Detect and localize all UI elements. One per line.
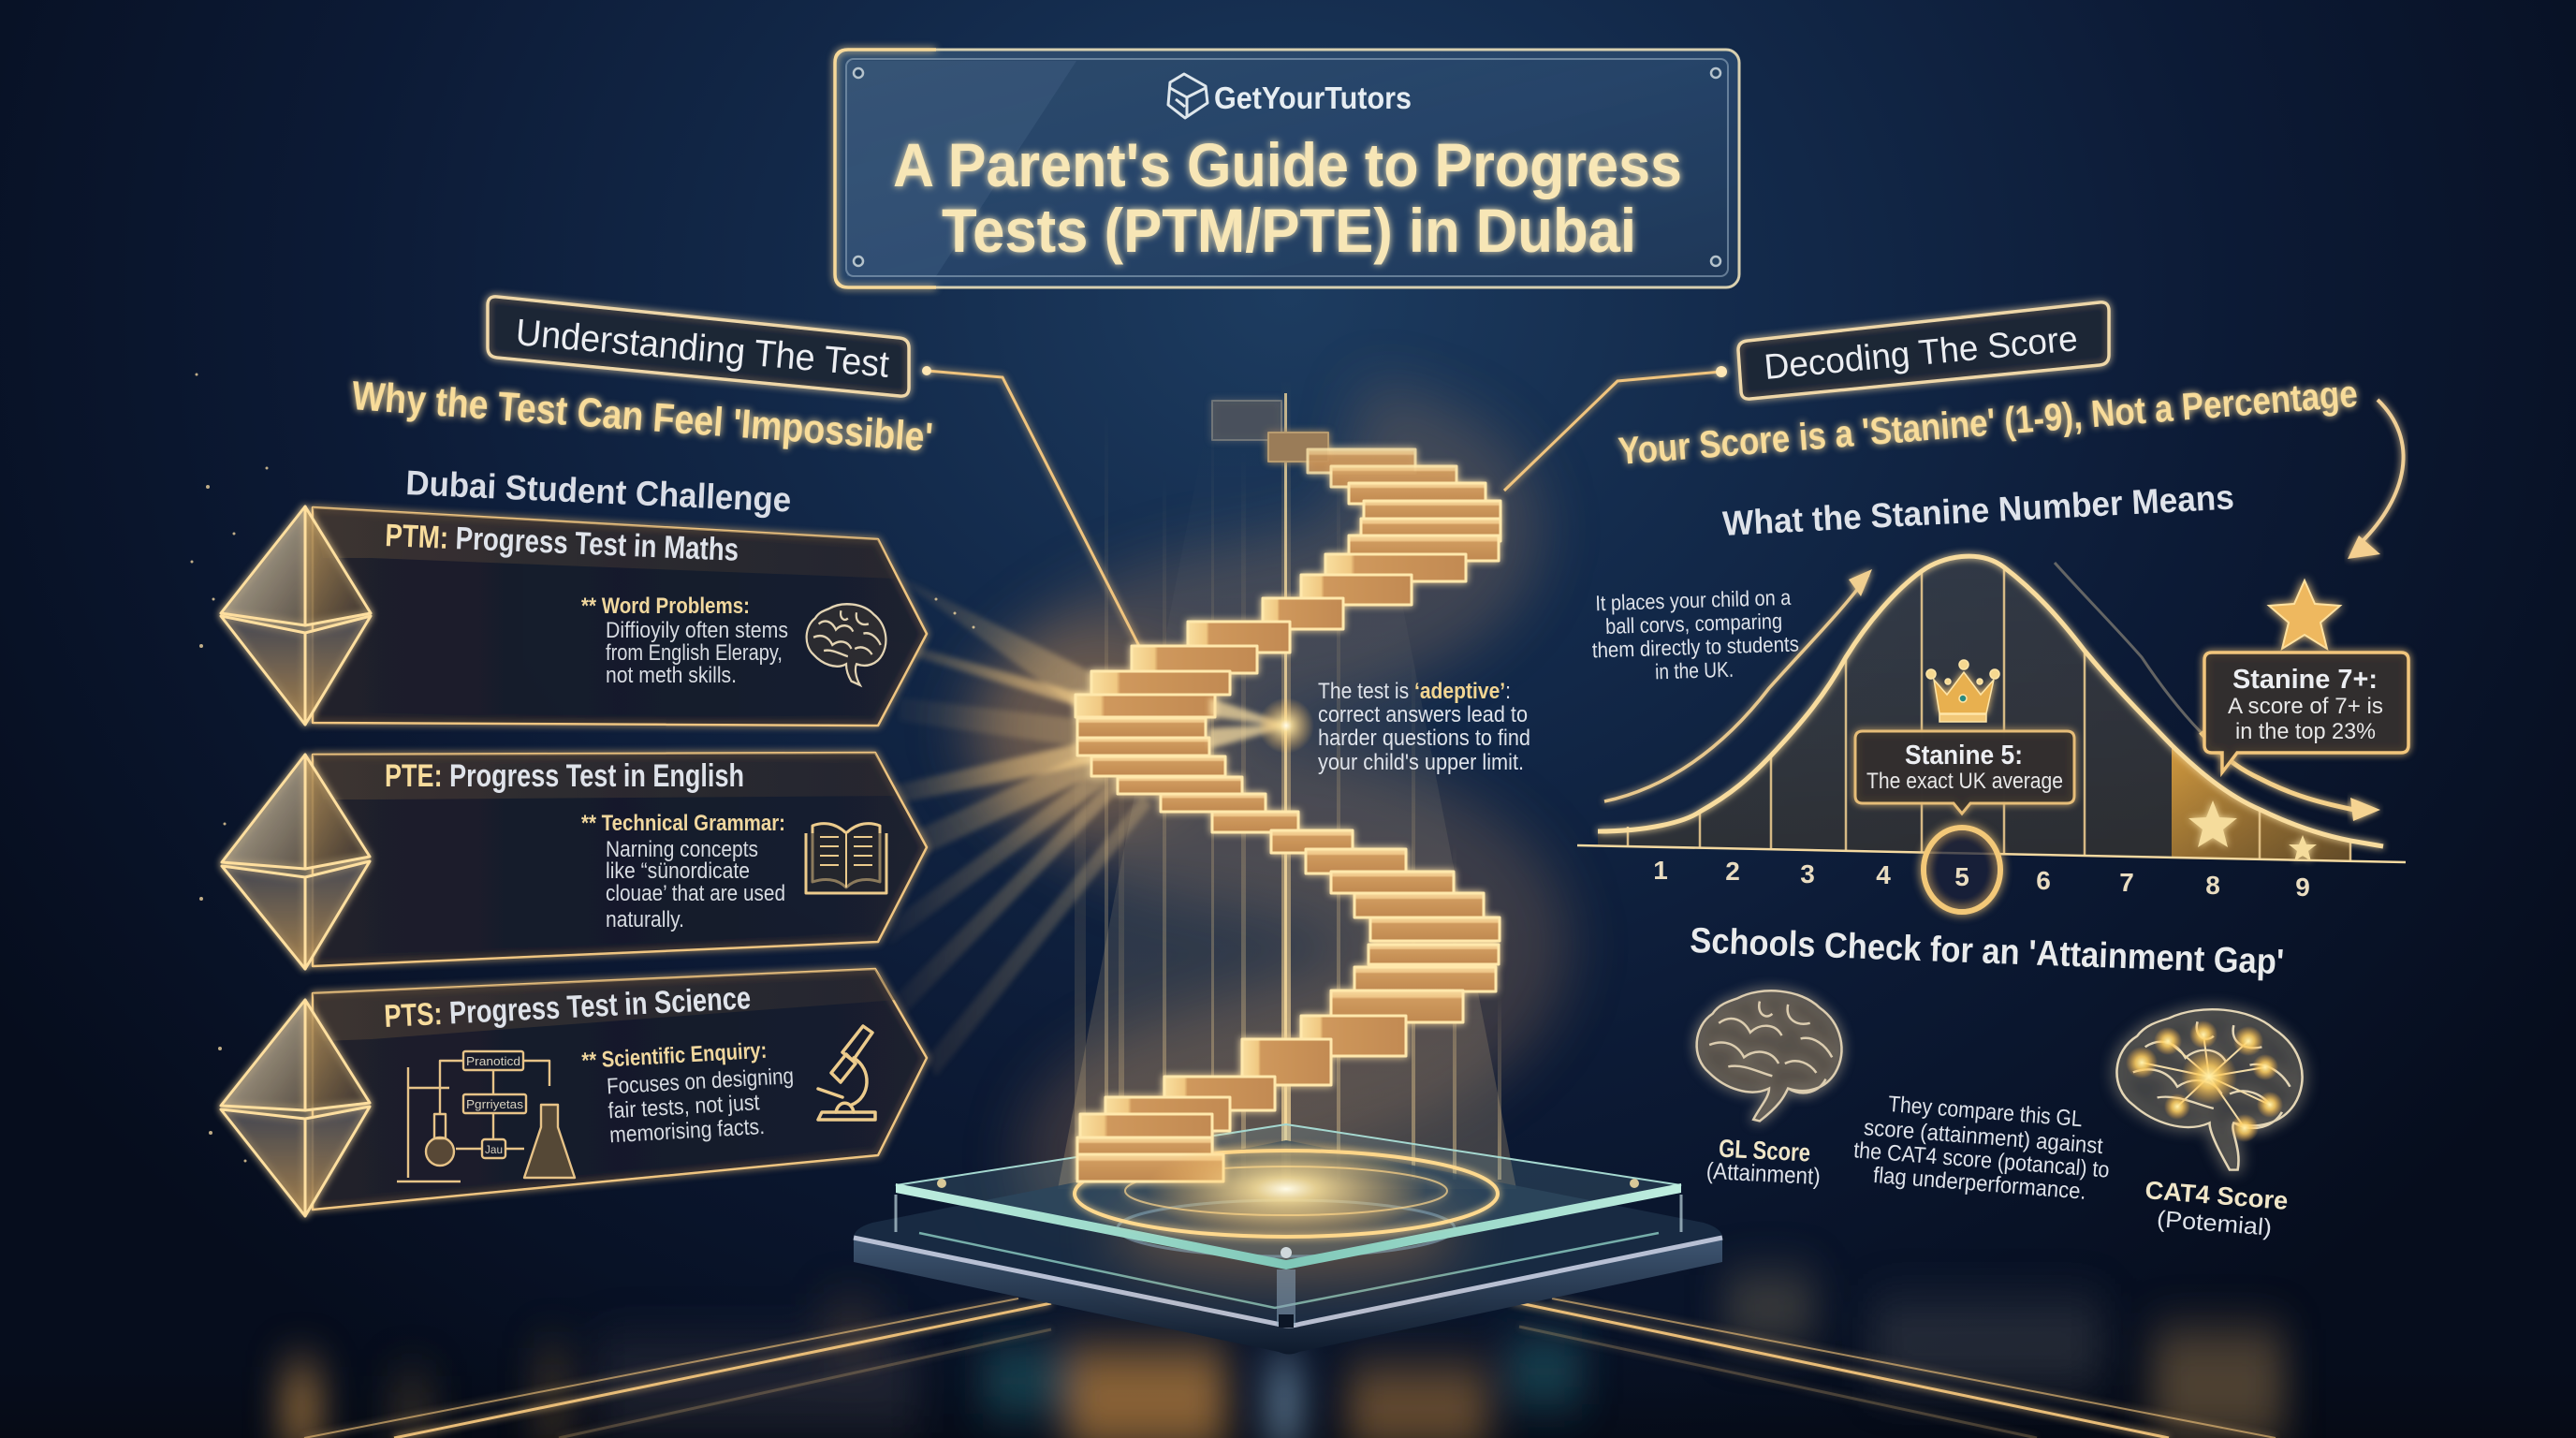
- axis numbers: 4: [1876, 860, 1891, 889]
- light beams behind staircase: [1058, 374, 1516, 1189]
- attainment gap explanation: They compare this GL: [1887, 1092, 2084, 1132]
- heading: your score is a stanine: Your Score is a 'Stanine' (1-9), Not a Percentage: [1617, 372, 2359, 473]
- callout: Stanine 5: Stanine 5:: [1905, 741, 2023, 770]
- GL score label: GL Score: [1718, 1134, 1811, 1167]
- attainment gap explanation: flag underperformance.: [1872, 1163, 2087, 1205]
- heading: why the test can feel impossible: Why the Test Can Feel 'Impossible': [350, 373, 934, 461]
- PTS heading: PTS: Progress Test in Science: [383, 980, 752, 1034]
- bell curve explanation: ball corvs, comparing: [1605, 609, 1782, 638]
- section dividers: [1628, 567, 2350, 860]
- PTE heading: PTE: Progress Test in English: [385, 758, 744, 794]
- subheading: what the stanine number means: What the Stanine Number Means: [1721, 477, 2235, 543]
- rivets: [854, 68, 1720, 266]
- axis numbers: 9: [2295, 873, 2310, 902]
- axis numbers: 3: [1800, 859, 1815, 888]
- central base glow: [1146, 1137, 1427, 1240]
- callout: Stanine 5: The exact UK average: [1866, 769, 2063, 794]
- attainment gap explanation: [1851, 1089, 2115, 1207]
- rising arrow: [1604, 569, 1872, 801]
- title text: [893, 130, 1682, 265]
- PTS experiment diagram: Pranoticd: [466, 1054, 520, 1068]
- title panel: [835, 50, 1739, 287]
- base plate: [854, 1140, 1722, 1354]
- neural nodes: [2126, 1020, 2283, 1142]
- axis numbers: 5: [1954, 862, 1969, 891]
- icon: PTS crystal: [221, 1000, 370, 1216]
- PTM body text: ** Word Problems:: [581, 594, 750, 619]
- panel: PTM: [221, 506, 927, 726]
- adaptive test note: your child's upper limit.: [1318, 750, 1524, 775]
- particles around crystals: [191, 373, 975, 1163]
- icon: CAT4 brain: [2116, 1009, 2303, 1170]
- icon: brain: [807, 604, 886, 685]
- ring around 5: [1924, 828, 2000, 912]
- glass top: [896, 1124, 1681, 1328]
- callout: Stanine 7+: [2204, 653, 2408, 772]
- GL score label: (Attainment): [1705, 1158, 1821, 1190]
- floor reflections: [0, 1275, 2576, 1438]
- floor-level glow ring: [1118, 1200, 1455, 1256]
- PTE body text: clouae’ that are used: [606, 881, 785, 906]
- axis numbers: 7: [2119, 868, 2134, 897]
- icon: PTE crystal: [222, 755, 370, 969]
- glow point at centre of staircase: [1209, 697, 1314, 754]
- title text: A Parent's Guide to Progress: [893, 130, 1682, 199]
- axis numbers: 2: [1725, 857, 1740, 886]
- connector: left heading to staircase: [922, 366, 1144, 655]
- callout: Stanine 5: [1855, 731, 2074, 814]
- axis numbers: 6: [2036, 866, 2051, 895]
- heading: schools check for attainment gap: Schools Check for an 'Attainment Gap': [1690, 921, 2285, 982]
- panel: PTS: [221, 969, 927, 1216]
- section tag: Decoding The Score: Decoding The Score: [1763, 319, 2079, 388]
- PTS experiment diagram: Pgrriyetas: [466, 1097, 524, 1111]
- axis numbers: 1: [1653, 856, 1668, 885]
- PTM body text: Diffioyily often stems: [606, 618, 788, 643]
- curve line: [1598, 556, 2383, 846]
- CAT4 score label: (Potemial): [2156, 1206, 2273, 1241]
- bell curve explanation: them directly to students: [1591, 631, 1799, 662]
- PTS body text: ** Scientific Enquiry:: [581, 1038, 768, 1074]
- PTE body text: naturally.: [606, 907, 684, 932]
- icon: gold star: [2269, 580, 2340, 649]
- staircase: [1076, 401, 1500, 1181]
- neural network lines: [2142, 1034, 2270, 1128]
- axis numbers: [1653, 856, 2310, 902]
- light rays from staircase to panels: [871, 562, 1151, 1077]
- icon: GetYourTutors logo: [1168, 74, 1208, 118]
- icon: PTM crystal: [221, 506, 371, 725]
- section tag: Understanding The Test: Understanding The Test: [514, 312, 891, 386]
- floor light lines: [304, 1299, 2276, 1438]
- bell curve explanation: It places your child on a: [1595, 585, 1792, 615]
- PTE body text: [581, 811, 785, 932]
- connector: right heading to staircase: [1504, 366, 1727, 491]
- ghost top step: [1212, 401, 1281, 440]
- adaptive test note: correct answers lead to: [1318, 702, 1528, 727]
- glass platform: [854, 1124, 1722, 1354]
- bell curve explanation: [1590, 585, 1800, 685]
- PTE body text: like “sünordicate: [606, 858, 750, 884]
- stanine stars: [2188, 800, 2317, 861]
- bell curve explanation: in the UK.: [1655, 657, 1734, 683]
- PTE body text: Narning concepts: [606, 837, 758, 862]
- PTM body text: [581, 594, 788, 688]
- icon: microscope: [818, 1026, 875, 1120]
- PTS experiment diagram: Jau: [485, 1143, 503, 1156]
- GL score label: [1705, 1134, 1822, 1190]
- falling arrow: [2055, 563, 2380, 821]
- gold highlight: stanines 8 and 9: [2172, 745, 2350, 860]
- icon: crown: [1926, 660, 1999, 722]
- bell curve chart: [1577, 556, 2406, 912]
- icon: open book: [806, 824, 886, 893]
- axis: [1577, 845, 2406, 862]
- adaptive test note: [1318, 679, 1530, 775]
- callout: Stanine 7+: in the top 23%: [2235, 719, 2376, 744]
- CAT4 score label: [2142, 1176, 2289, 1242]
- arrow: curved from heading to star: [2348, 400, 2404, 559]
- logo text: GetYourTutors: [1214, 81, 1412, 115]
- callout: Stanine 7+: Stanine 7+:: [2232, 665, 2378, 695]
- CAT4 score label: CAT4 Score: [2144, 1176, 2289, 1215]
- glowing rings: [1075, 1151, 1498, 1237]
- curve fill: [1598, 556, 2172, 858]
- PTS experiment diagram: [397, 1051, 575, 1181]
- PTS body text: memorising facts.: [608, 1114, 766, 1148]
- warm under-glass reflection: [1108, 1189, 1464, 1283]
- subheading: Dubai Student Challenge: Dubai Student Challenge: [405, 463, 792, 520]
- PTM body text: not meth skills.: [606, 663, 737, 688]
- PTS body text: [581, 1036, 798, 1150]
- attainment gap explanation: the CAT4 score (potancal) to: [1852, 1137, 2110, 1183]
- adaptive test note: The test is ‘adeptive’:: [1318, 679, 1511, 704]
- callout: Stanine 7+: A score of 7+ is: [2228, 694, 2383, 719]
- icon: GL brain: [1697, 990, 1841, 1121]
- attainment gap explanation: score (attainment) against: [1863, 1115, 2104, 1159]
- axis numbers: 8: [2205, 871, 2220, 900]
- section tag: Decoding The Score: [1738, 302, 2109, 399]
- PTS body text: fair tests, not just: [607, 1090, 760, 1123]
- title text: Tests (PTM/PTE) in Dubai: [942, 196, 1636, 265]
- PTE body text: ** Technical Grammar:: [581, 811, 785, 836]
- PTM body text: from English Elerapy,: [606, 640, 783, 666]
- adaptive test note: harder questions to find: [1318, 726, 1530, 751]
- panel: PTE: [222, 753, 927, 969]
- warm bloom behind staircase: [964, 468, 1481, 1180]
- PTM heading: PTM: Progress Test in Maths: [385, 518, 739, 568]
- PTS body text: Focuses on designing: [606, 1064, 795, 1100]
